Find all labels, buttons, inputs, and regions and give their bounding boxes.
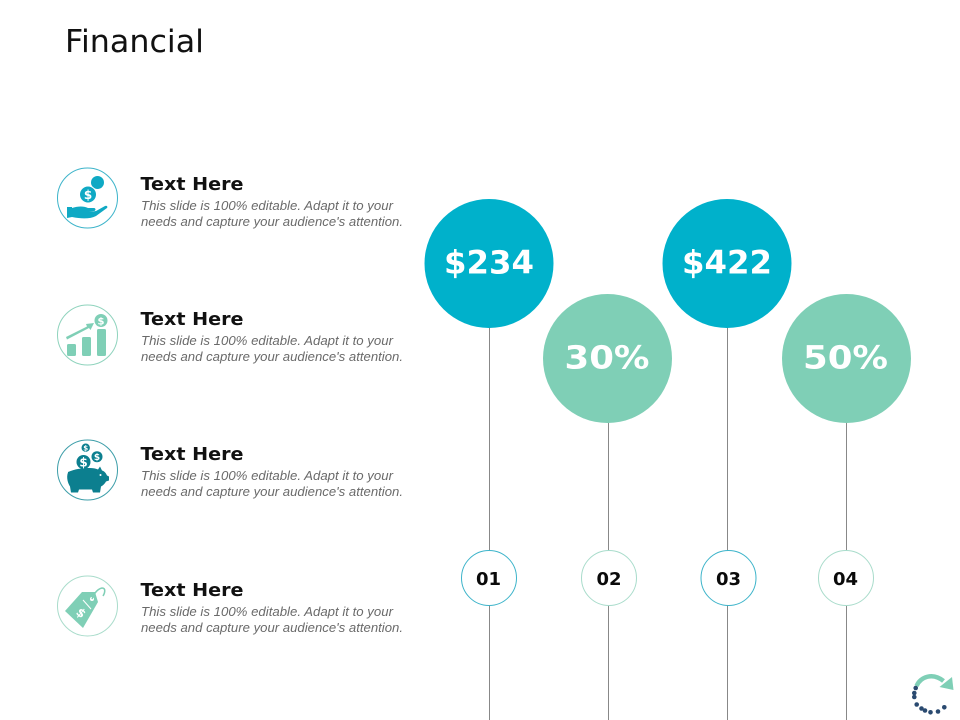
title: Financial — [65, 24, 204, 60]
circle: $234 — [424, 199, 554, 328]
heading: Text Here — [140, 174, 244, 195]
item 4: price tag — [58, 576, 403, 636]
text block — [141, 604, 403, 635]
number badge 03: 03 — [716, 569, 741, 590]
circle: $422 — [662, 199, 792, 328]
icon: bars and arrow — [58, 305, 118, 365]
text block: needs and capture your audience's attention. — [141, 214, 403, 229]
icon: price tag: $ — [73, 605, 89, 621]
heading: Text Here — [140, 309, 244, 330]
text block: This slide is 100% editable. Adapt it to your — [141, 604, 394, 619]
number badge 02 — [582, 550, 636, 606]
vertical timeline lines — [490, 320, 846, 720]
text block: needs and capture your audience's attention. — [141, 620, 403, 635]
number badge 01 — [462, 550, 516, 606]
item 1: hand with coins — [58, 168, 403, 229]
circle: 30% — [543, 294, 672, 423]
text block — [141, 198, 403, 229]
text block — [141, 468, 403, 499]
number badge 03 — [701, 550, 756, 606]
text block: This slide is 100% editable. Adapt it to your — [141, 468, 394, 483]
circle: $422: $422 — [682, 244, 772, 282]
text block — [141, 333, 403, 364]
icon: price tag — [58, 576, 118, 636]
icon: bars and arrow: $ — [98, 316, 105, 328]
icon: piggy bank with coins — [58, 440, 118, 500]
circle: $234: $234 — [444, 244, 534, 282]
text block: needs and capture your audience's attention. — [141, 349, 403, 364]
text block: This slide is 100% editable. Adapt it to your — [141, 333, 394, 348]
text block: needs and capture your audience's attention. — [141, 484, 403, 499]
item 3: piggy bank — [58, 440, 403, 500]
circle: 50% — [782, 294, 911, 423]
circle: 50%: 50% — [803, 338, 888, 376]
number badge 01: 01 — [476, 569, 501, 590]
number badge 04 — [818, 550, 874, 606]
item 2: growth chart — [58, 305, 403, 365]
circle: 30%: 30% — [564, 338, 650, 376]
heading: Text Here — [140, 444, 244, 465]
number badge 02: 02 — [596, 569, 622, 590]
icon: hand holding coins — [58, 168, 118, 228]
heading: Text Here — [140, 580, 244, 601]
icon: piggy bank with coins: $ — [83, 444, 88, 452]
icon: circular arrow — [912, 676, 954, 715]
icon: piggy bank with coins: $ — [94, 453, 100, 463]
icon: piggy bank with coins: $ — [79, 456, 88, 470]
number badge 04: 04 — [833, 569, 858, 590]
text block: This slide is 100% editable. Adapt it to your — [141, 198, 394, 213]
icon: hand holding coins: $ — [84, 188, 92, 202]
